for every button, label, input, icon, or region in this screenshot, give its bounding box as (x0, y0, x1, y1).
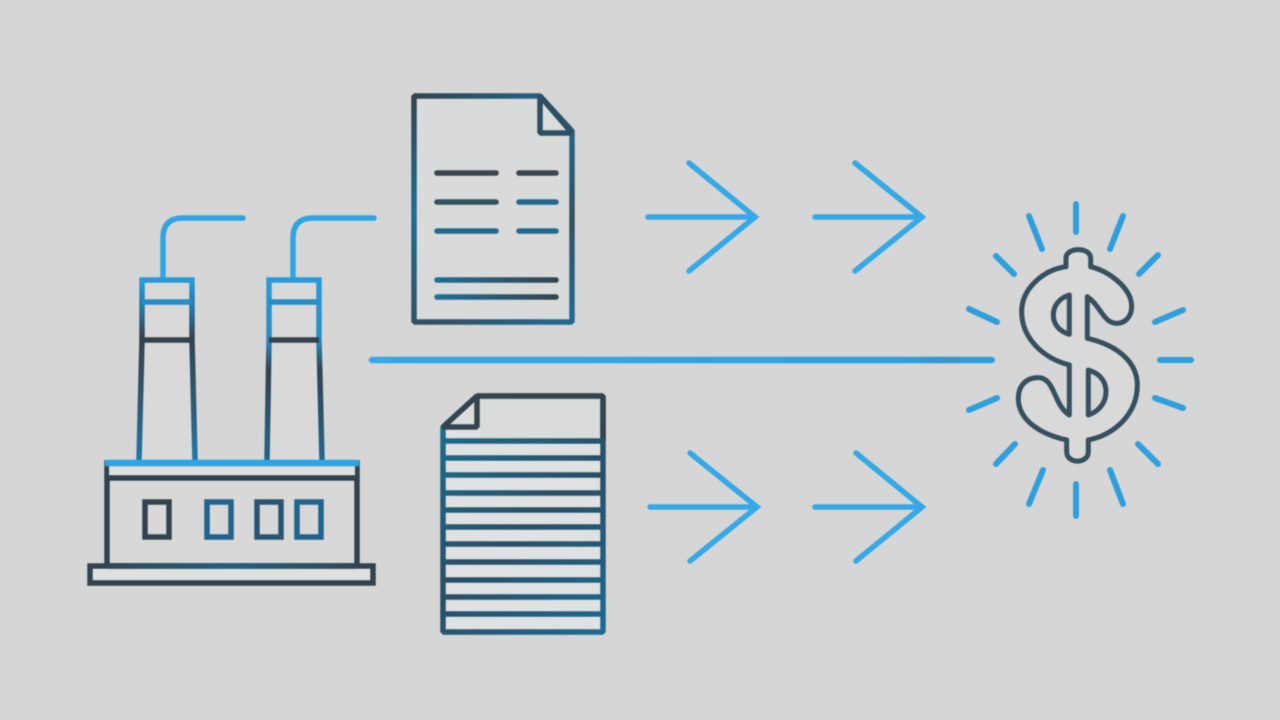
smoke pipe left (163, 218, 243, 278)
chimney left (139, 280, 195, 460)
icon: long document (443, 396, 603, 632)
dollar outline (1018, 250, 1137, 461)
icon: factory (90, 218, 374, 583)
smoke pipe right (293, 218, 374, 278)
ruled lines (443, 441, 603, 614)
connector line: factory to dollar (372, 357, 991, 363)
icon: shining dollar (962, 204, 1191, 516)
arrow: bottom first (650, 453, 757, 561)
factory base (90, 566, 373, 583)
arrow: top first (648, 163, 755, 271)
page fold (443, 396, 477, 427)
rays (962, 204, 1191, 516)
arrow: top second (815, 163, 922, 271)
arrow: bottom second (815, 453, 922, 561)
page outline (414, 96, 572, 322)
top margin (480, 399, 600, 438)
chimney right (267, 280, 322, 460)
factory windows (145, 502, 321, 537)
page fold (540, 96, 572, 133)
factory body (105, 463, 359, 566)
page outline (443, 396, 603, 632)
icon: short document (414, 96, 572, 322)
text lines (437, 173, 556, 297)
